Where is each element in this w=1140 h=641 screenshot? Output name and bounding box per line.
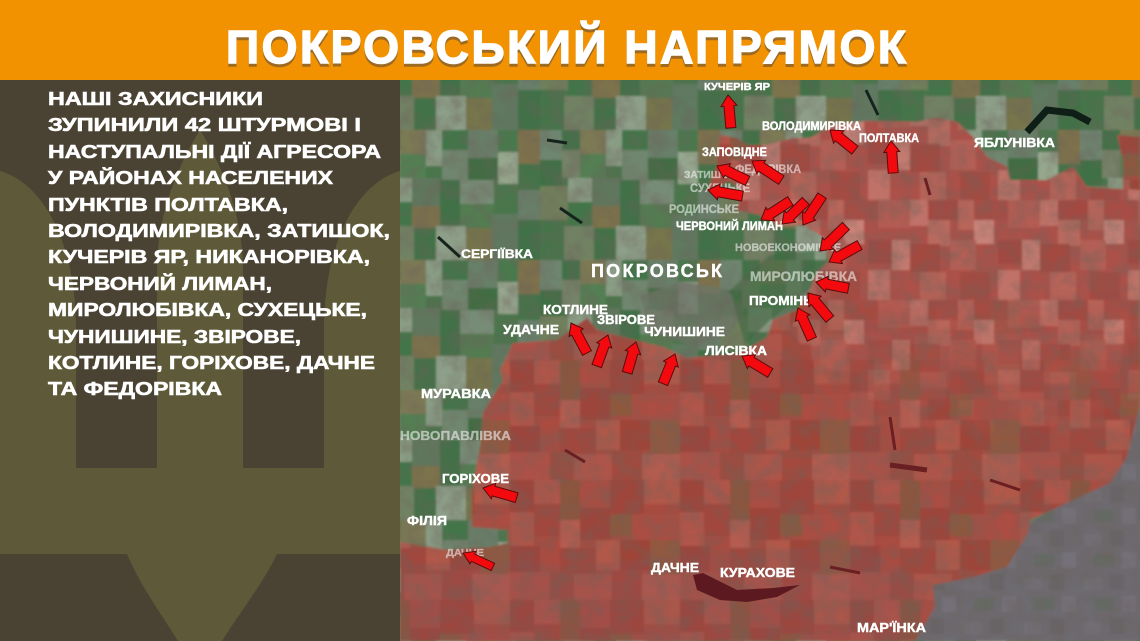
panel: left text block: ПУНКТІВ ПОЛТАВКА, bbox=[48, 195, 288, 215]
panel: left text block: ТА ФЕДОРІВКА bbox=[48, 379, 222, 399]
map labels: УДАЧНЕ bbox=[503, 323, 559, 337]
map labels: ПОКРОВСЬК bbox=[591, 261, 723, 281]
title bar bbox=[0, 0, 1140, 80]
panel: left text block: ЗУПИНИЛИ 42 ШТУРМОВІ І bbox=[48, 115, 361, 135]
map labels: ЧЕРВОНИЙ ЛИМАН bbox=[676, 220, 783, 233]
map labels: КУЧЕРІВ ЯР bbox=[704, 81, 770, 93]
map: green tint bbox=[390, 70, 1140, 641]
map: grey city area bottom right bbox=[900, 400, 1140, 641]
panel: left text block: МИРОЛЮБІВКА, СУХЕЦЬКЕ, bbox=[48, 300, 367, 320]
map: ravines bbox=[565, 178, 1020, 573]
map: purple-tinted band around Kurakhove bbox=[406, 575, 924, 622]
map labels: ЯБЛУНІВКА bbox=[974, 135, 1056, 150]
map labels bbox=[400, 81, 1056, 635]
map: terrain layers bbox=[390, 70, 1140, 641]
panel: left text block: ЧЕРВОНИЙ ЛИМАН, bbox=[48, 273, 272, 294]
attack arrows bbox=[460, 94, 901, 573]
map: red tint bbox=[400, 118, 1140, 641]
panel: left text block: У РАЙОНАХ НАСЕЛЕНИХ bbox=[48, 167, 333, 188]
map labels: СЕРГІЇВКА bbox=[461, 246, 533, 261]
map labels: ФІЛІЯ bbox=[407, 514, 447, 528]
panel: left text block: НАСТУПАЛЬНІ ДІЇ АГРЕСОРА bbox=[48, 142, 381, 162]
map labels: ЗАПОВІДНЕ bbox=[702, 147, 767, 159]
map labels: РОДИНСЬКЕ bbox=[669, 204, 739, 216]
map: satellite texture bbox=[400, 80, 1140, 641]
map labels: МАР'ЇНКА bbox=[857, 620, 926, 635]
panel: left text block: ВОЛОДИМИРІВКА, ЗАТИШОК, bbox=[48, 221, 390, 241]
map: Yablunivka dark reservoir bbox=[1027, 110, 1090, 132]
map labels: КУРАХОВЕ bbox=[720, 566, 795, 580]
map bbox=[390, 70, 1140, 641]
map labels: ДАЧНЕ bbox=[446, 547, 484, 559]
panel: left text block: НАШІ ЗАХИСНИКИ bbox=[48, 89, 263, 109]
map labels: ФЕДОРІВКА bbox=[735, 164, 801, 176]
map labels: МИРОЛЮБІВКА bbox=[750, 268, 857, 284]
panel: left text block: КУЧЕРІВ ЯР, НИКАНОРІВКА, bbox=[48, 247, 370, 267]
title: ПОКРОВСЬКИЙ НАПРЯМОК bbox=[226, 24, 907, 76]
map labels: ГОРІХОВЕ bbox=[442, 472, 509, 486]
map labels: ДАЧНЕ bbox=[651, 561, 699, 575]
panel: left text block bbox=[48, 89, 390, 399]
map: green-dark belt near Myroliubivka bbox=[730, 250, 815, 345]
map: occupied territory bbox=[400, 118, 1140, 641]
map labels: НОВОПАВЛІВКА bbox=[400, 428, 512, 443]
panel: left text block: КОТЛИНЕ, ГОРІХОВЕ, ДАЧНЕ bbox=[48, 353, 375, 373]
map labels: ПОЛТАВКА bbox=[859, 133, 919, 145]
left panel background bbox=[0, 80, 400, 641]
map labels: КОТЛИНЕ bbox=[543, 303, 608, 317]
map: dark water lines bbox=[438, 90, 878, 257]
title: ПОКРОВСЬКИЙ НАПРЯМОК bbox=[226, 21, 907, 73]
map labels: ЧУНИШИНЕ bbox=[644, 325, 725, 339]
trident emblem bbox=[0, 130, 400, 641]
map: Pokrovsk urban area bbox=[640, 282, 745, 345]
map: green territory bbox=[390, 70, 1140, 641]
map labels: ЗВІРОВЕ bbox=[597, 313, 655, 327]
panel: left text block: ЧУНИШИНЕ, ЗВІРОВЕ, bbox=[48, 327, 301, 347]
map labels: ВОЛОДИМИРІВКА bbox=[762, 121, 861, 133]
map labels: НОВОЕКОНОМІЧНЕ bbox=[735, 242, 841, 254]
map labels: ЛИСІВКА bbox=[705, 344, 767, 358]
map labels: МУРАВКА bbox=[421, 387, 491, 401]
map: Kurakhove reservoir bbox=[693, 573, 800, 602]
map: occupied territory lighter north-east bbox=[730, 118, 1140, 440]
map labels: ЗАТИШОК bbox=[684, 169, 736, 181]
map labels: ПРОМІНЬ bbox=[749, 293, 813, 308]
map labels: СУХЕЦЬКЕ bbox=[690, 181, 750, 195]
